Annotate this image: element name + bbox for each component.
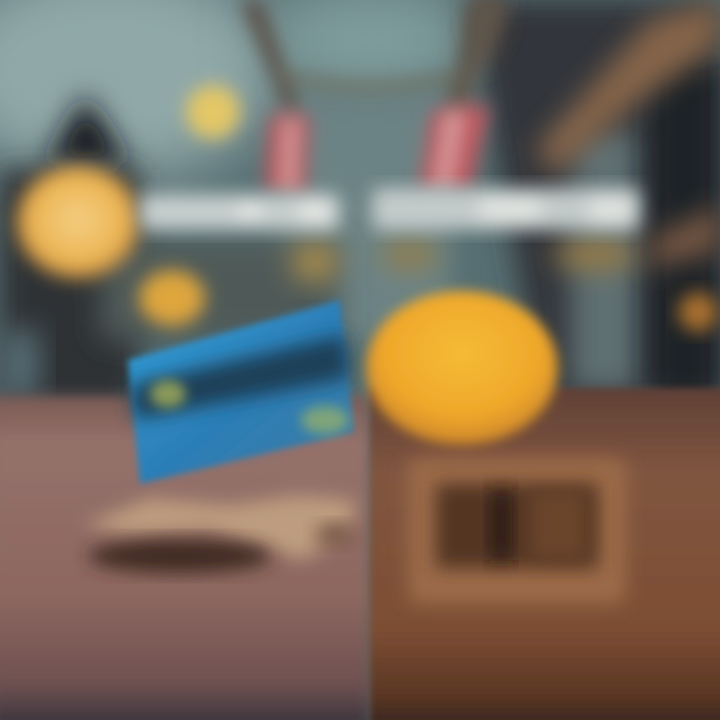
lamp: small round yellow light: [186, 85, 240, 139]
large gold coin: [366, 291, 558, 445]
broken cracker pieces: [84, 495, 355, 573]
background: building and sky: [0, 0, 720, 420]
background: faint gold reflections: [291, 239, 637, 282]
lamp: low yellow light: [139, 270, 205, 326]
lamp: right distant light: [678, 292, 718, 332]
blurred white headline band: [140, 188, 640, 230]
credit card: [128, 300, 354, 484]
lamp: left large glowing lantern: [16, 95, 140, 279]
background: wooden beams top right: [470, 0, 720, 268]
hanging lanyard straps: [240, 0, 505, 195]
wooden box on table: [408, 458, 626, 604]
table surface right: [370, 388, 720, 720]
table surface left: [0, 396, 370, 720]
